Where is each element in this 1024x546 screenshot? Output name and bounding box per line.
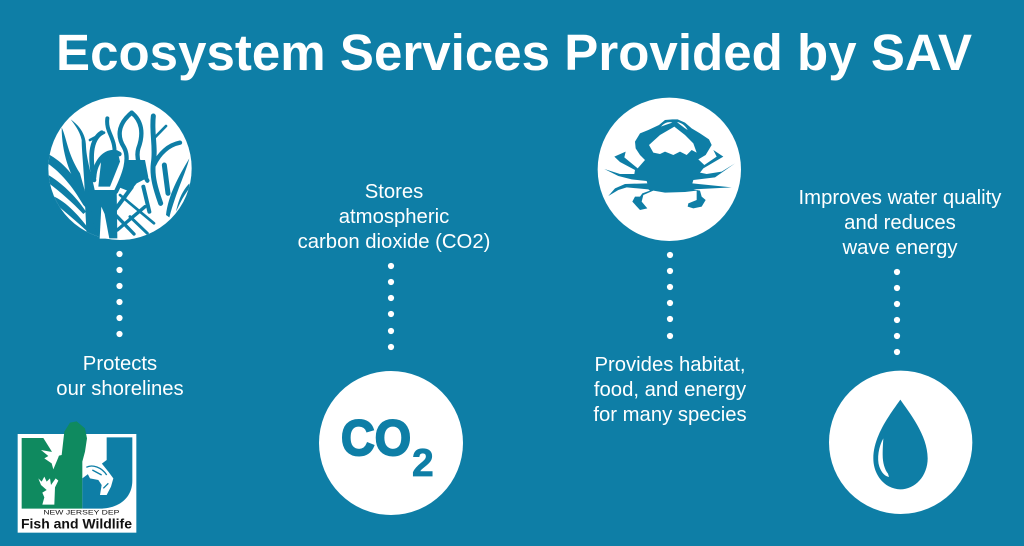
label: Improves water quality [799, 187, 1002, 209]
logo background [18, 434, 136, 533]
fish [84, 462, 113, 495]
label: Provides habitat, [594, 354, 746, 376]
icon: seagrass in circle [47, 97, 192, 240]
icon: CO2 in circle: CO [341, 410, 411, 466]
dotted connector [894, 269, 900, 355]
icon: CO2 in circle [319, 371, 463, 515]
logo: New Jersey DEP Fish and Wildlife: Fish and Wildlife [21, 516, 132, 531]
dotted connector [388, 263, 394, 350]
label: wave energy [842, 237, 958, 259]
dotted connector [667, 252, 673, 339]
dotted connector [116, 251, 123, 337]
logo text: NEW JERSEY DEP [43, 511, 119, 517]
label: atmospheric [339, 206, 449, 228]
label: our shorelines [56, 378, 184, 400]
title: Ecosystem Services Provided by SAV [56, 24, 972, 81]
deer [38, 477, 58, 505]
label: carbon dioxide (CO2) [298, 231, 490, 253]
letter N with eagle wing [22, 421, 87, 509]
icon: CO2 in circle: 2 [412, 442, 434, 485]
label: for many species [593, 404, 747, 426]
label: and reduces [844, 212, 956, 234]
icon: crab in circle [598, 98, 741, 241]
eagle head [41, 450, 60, 469]
panel: protects our shorelines [47, 97, 192, 400]
label: Protects [83, 353, 157, 375]
panel: improves water quality [799, 187, 1002, 514]
letter J [82, 437, 132, 509]
panel: stores carbon dioxide [298, 181, 490, 515]
label: Stores [365, 181, 423, 203]
label: food, and energy [594, 379, 747, 401]
icon: water drop in circle [829, 371, 972, 514]
panel: provides habitat [593, 98, 747, 426]
logo: New Jersey DEP Fish and Wildlife [18, 421, 136, 533]
